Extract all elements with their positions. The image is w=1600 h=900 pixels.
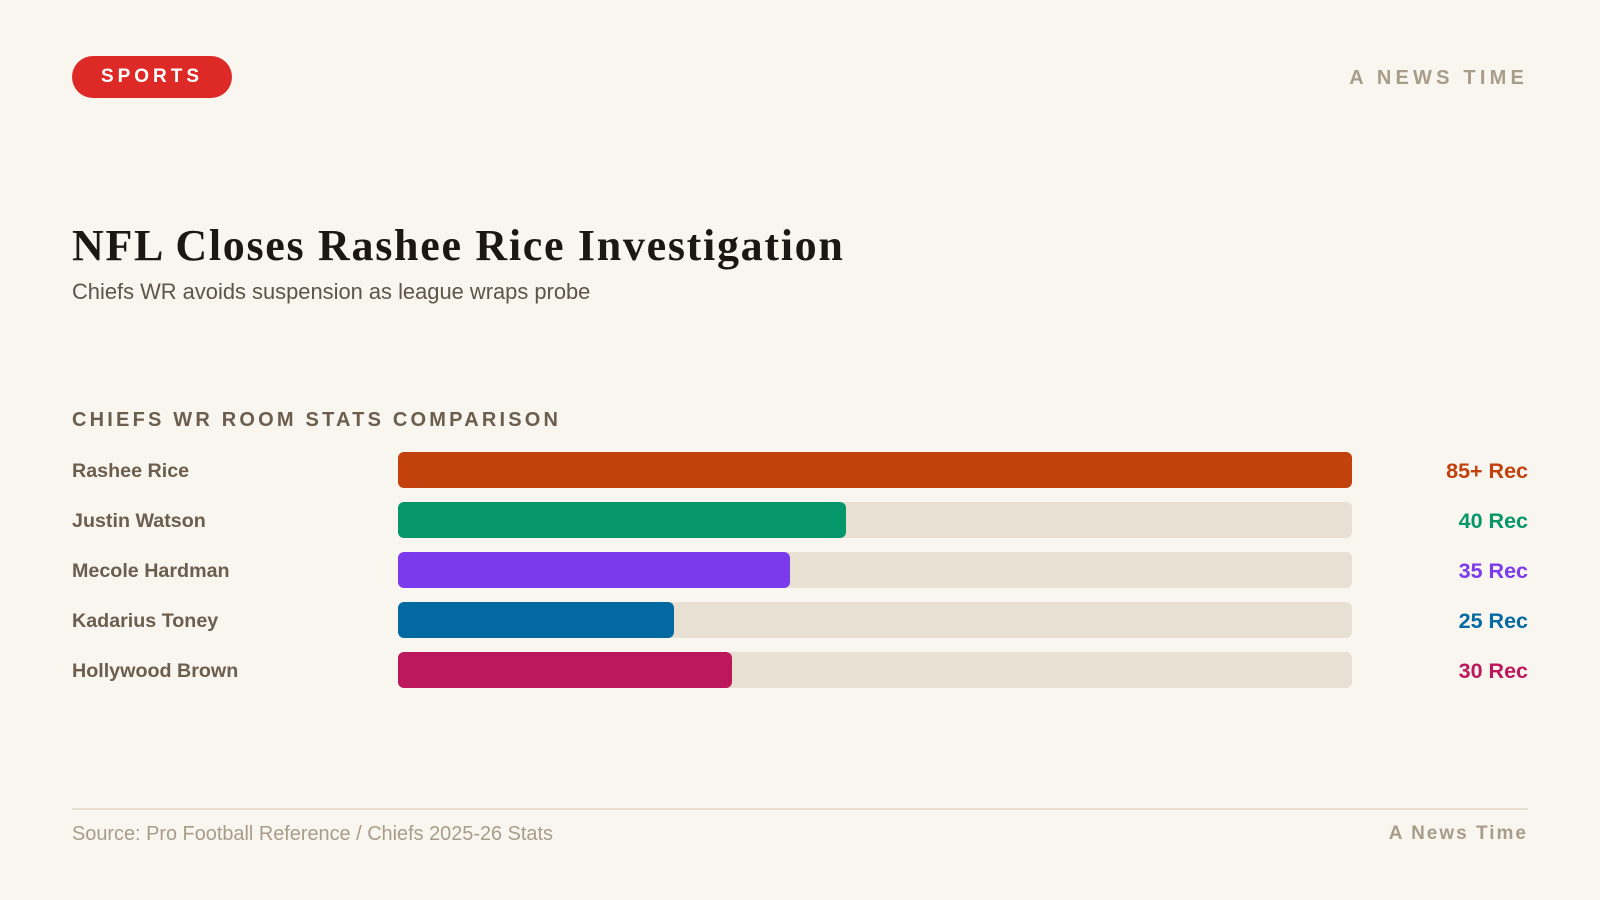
bar row: Kadarius Toney [72,602,1528,638]
badge: sports: SPORTS [101,66,203,87]
source: Source: Pro Football Reference / Chiefs 2025-26 Stats [72,823,553,845]
subtitle: Chiefs WR avoids suspension as league wraps probe [72,279,590,304]
footer brand: A News Time [1389,823,1528,844]
brand header: A NEWS TIME [1349,67,1528,89]
bar row: Hollywood Brown [72,652,1528,688]
bar row: Kadarius Toney: 25 Rec [1459,609,1528,633]
bar row: Mecole Hardman [72,552,1528,588]
bar row: Justin Watson: Justin Watson [72,510,206,532]
title: NFL Closes Rashee Rice Investigation [72,221,845,270]
bar row: Rashee Rice: Rashee Rice [72,460,189,482]
section heading: CHIEFS WR ROOM STATS COMPARISON [72,409,561,431]
badge: sports [72,56,232,98]
bar row: Rashee Rice [72,452,1528,488]
bar row: Mecole Hardman: 35 Rec [1459,559,1528,583]
bar row: Kadarius Toney: Kadarius Toney [72,610,218,632]
bar row: Justin Watson [72,502,1528,538]
bar row: Mecole Hardman: Mecole Hardman [72,560,230,582]
bar row: Hollywood Brown: Hollywood Brown [72,660,238,682]
bar row: Justin Watson: 40 Rec [1459,509,1528,533]
bar row: Rashee Rice: 85+ Rec [1446,459,1528,483]
bar row: Hollywood Brown: 30 Rec [1459,659,1528,683]
